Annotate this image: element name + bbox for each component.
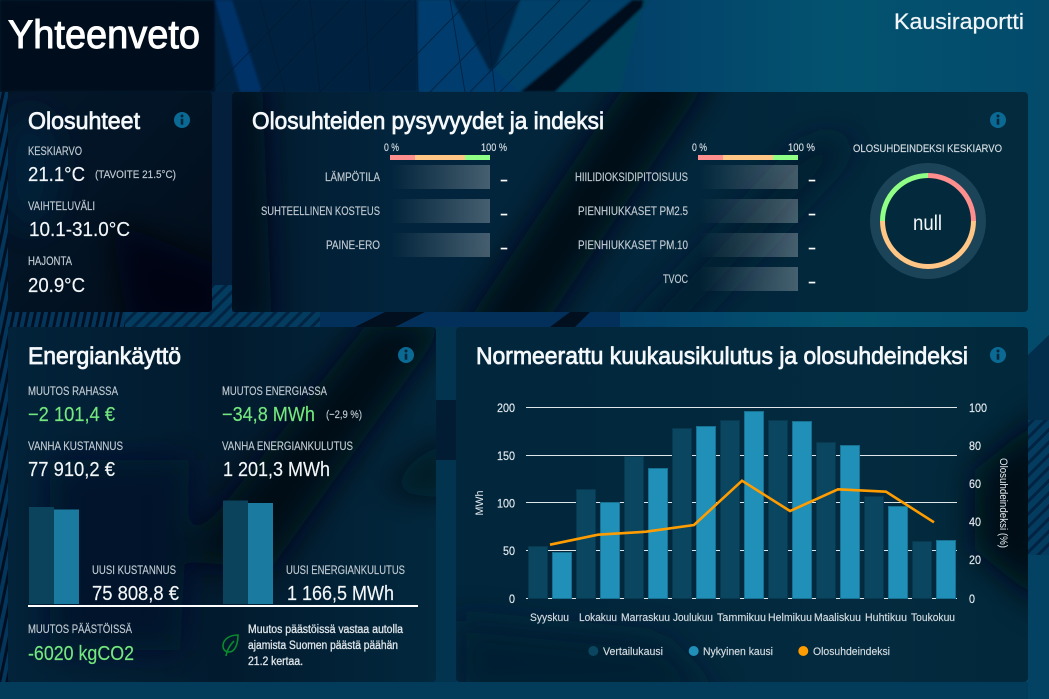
left axis labels: 50	[503, 546, 515, 558]
right axis labels: 80	[969, 441, 981, 453]
right axis labels: 20	[969, 555, 981, 567]
row: PM2.5: PIENHIUKKASET PM2.5	[578, 204, 688, 218]
conditions content	[28, 108, 176, 297]
old cost	[28, 439, 123, 481]
row: humidity: –	[501, 205, 507, 221]
info icon: stability	[990, 112, 1006, 128]
energy change: MUUTOS ENERGIASSA	[222, 384, 327, 398]
legend: Olosuhdeindeksi	[813, 646, 890, 658]
new cost: UUSI KUSTANNUS	[92, 563, 176, 577]
bars: comparison period	[528, 420, 932, 598]
month labels: Toukokuu	[911, 612, 955, 624]
row: humidity: SUHTEELLINEN KOSTEUS	[261, 204, 380, 218]
gridlines	[526, 408, 957, 598]
row: PM10: –	[809, 239, 815, 255]
left axis labels: 100	[497, 498, 515, 510]
row: TVOC: TVOC	[663, 272, 688, 286]
donut heading: OLOSUHDEINDEKSI KESKIARVO	[853, 143, 1002, 155]
new cost: 75 808,8 €	[92, 583, 179, 605]
bars: current period	[552, 412, 956, 598]
emissions note: ajamista Suomen päästä päähän	[248, 640, 398, 652]
label: average: KESKIARVO	[28, 144, 82, 158]
new consumption: UUSI ENERGIANKULUTUS	[286, 563, 405, 577]
money change: MUUTOS RAHASSA	[28, 384, 118, 398]
old consumption	[222, 439, 353, 481]
label: range: VAIHTELUVÄLI	[28, 199, 95, 213]
old cost: 77 910,2 €	[28, 459, 115, 481]
scale right: 100 %	[788, 142, 815, 154]
info icon: conditions	[174, 112, 190, 128]
money change	[28, 384, 118, 426]
row: pressure: PAINE-ERO	[326, 238, 380, 252]
panel: Olosuhteiden pysyvyydet ja indeksi	[232, 92, 1028, 312]
line: condition index	[550, 481, 934, 545]
energy content	[28, 343, 418, 668]
value: range: 10.1-31.0°C	[29, 219, 130, 241]
month labels	[530, 612, 955, 624]
emissions change: MUUTOS PÄÄSTÖISSÄ	[28, 622, 132, 636]
panel: Normeerattu kuukausikulutus	[456, 327, 1049, 699]
right axis labels: 0	[969, 594, 975, 606]
scale left	[384, 142, 507, 160]
scale right	[692, 142, 815, 160]
donut gauge: null	[913, 212, 942, 235]
panel: Energiankäyttö	[8, 320, 450, 682]
row: PM2.5	[578, 199, 815, 223]
right axis labels: 60	[969, 479, 981, 491]
row: CO2: –	[809, 171, 815, 187]
row: TVOC: –	[809, 273, 815, 289]
heading: chart: Normeerattu kuukausikulutus ja olosuhdeindeksi	[476, 343, 968, 370]
heading: energy: Energiankäyttö	[28, 343, 181, 370]
right axis labels: 100	[969, 403, 987, 415]
right axis labels: 40	[969, 517, 981, 529]
legend	[588, 646, 890, 658]
month labels: Syyskuu	[530, 612, 569, 624]
row: CO2: HIILIDIOKSIDIPITOISUUS	[575, 170, 688, 184]
axis title: index: Olosuhdeindeksi (%)	[997, 458, 1009, 548]
scale left: 100 %	[481, 142, 507, 154]
row: PM10	[578, 233, 815, 257]
right axis labels	[969, 403, 987, 606]
left axis labels: 150	[497, 451, 515, 463]
title: Yhteenveto	[8, 13, 200, 57]
cost bars	[29, 507, 79, 604]
row: PM2.5: –	[809, 205, 815, 221]
value: deviation: 20.9°C	[28, 275, 85, 297]
scale right: 0 %	[692, 142, 707, 154]
old consumption: 1 201,3 MWh	[223, 459, 330, 481]
label: deviation: HAJONTA	[28, 254, 72, 268]
donut gauge	[875, 168, 981, 274]
month labels: Lokakuu	[579, 612, 617, 624]
row: TVOC	[663, 267, 815, 291]
heading: Olosuhteet: Olosuhteet	[28, 108, 140, 135]
report type: Kausiraportti	[894, 9, 1024, 34]
new consumption	[286, 563, 405, 605]
left axis labels: 0	[509, 594, 515, 606]
new cost	[92, 563, 179, 605]
info icon: energy	[398, 347, 414, 363]
energy change	[222, 384, 362, 426]
value: average: 21.1°C	[28, 164, 85, 186]
axis title: MWh: MWh	[474, 490, 486, 516]
emissions note	[248, 624, 404, 668]
emissions change: -6020 kgCO2	[28, 643, 134, 665]
baseline	[28, 605, 418, 607]
row: pressure: –	[501, 239, 507, 255]
energy change: −34,8 MWh	[222, 404, 315, 426]
old cost: VANHA KUSTANNUS	[28, 439, 123, 453]
month labels: Huhtikuu	[865, 612, 907, 624]
emissions note: Muutos päästöissä vastaa autolla	[248, 624, 404, 636]
consumption bars	[223, 500, 273, 604]
info icon: chart	[990, 347, 1006, 363]
month labels: Marraskuu	[621, 612, 670, 624]
energy change: (−2,9 %)	[326, 409, 362, 421]
month labels: Helmikuu	[768, 612, 812, 624]
row: pressure	[326, 233, 507, 257]
left axis labels: 200	[497, 403, 515, 415]
row: temperature	[325, 165, 507, 189]
month labels: Maaliskuu	[814, 612, 861, 624]
month labels: Tammikuu	[717, 612, 766, 624]
emissions note: 21.2 kertaa.	[248, 656, 303, 668]
chart content	[474, 343, 1009, 658]
stability content	[252, 108, 1002, 291]
scale left: 0 %	[384, 142, 399, 154]
emissions change	[28, 622, 134, 665]
panel: Olosuhteet	[8, 92, 212, 312]
month labels: Joulukuu	[673, 612, 713, 624]
left axis labels	[497, 403, 515, 606]
heading: stability: Olosuhteiden pysyvyydet ja indeksi	[252, 108, 604, 135]
money change: −2 101,4 €	[28, 404, 115, 426]
row: temperature: –	[501, 171, 507, 187]
row: PM10: PIENHIUKKASET PM.10	[578, 238, 688, 252]
legend: Vertailukausi	[603, 646, 663, 658]
legend: Nykyinen kausi	[703, 646, 773, 658]
target: (TAVOITE 21.5°C)	[95, 169, 176, 181]
icon: leaf	[223, 635, 238, 656]
new consumption: 1 166,5 MWh	[287, 583, 394, 605]
row: temperature: LÄMPÖTILA	[325, 170, 380, 184]
old consumption: VANHA ENERGIANKULUTUS	[222, 439, 353, 453]
row: CO2	[575, 165, 815, 189]
row: humidity	[261, 199, 507, 223]
